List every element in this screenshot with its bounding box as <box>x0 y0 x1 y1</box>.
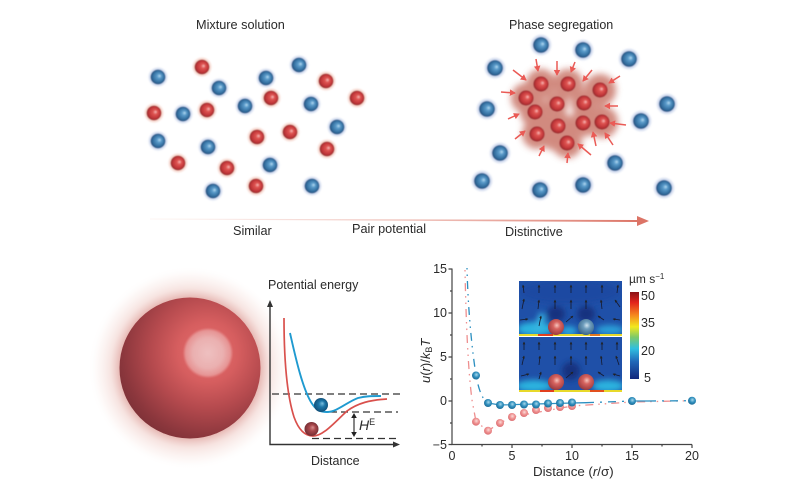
y axis title: B <box>424 347 434 353</box>
y tick labels: 10 <box>433 306 447 320</box>
y tick labels: 5 <box>440 350 447 364</box>
red potential curve <box>284 318 387 436</box>
red ball <box>304 422 318 436</box>
red particles, mixture <box>144 56 368 196</box>
red particles, segregated <box>518 76 610 150</box>
label: distinctive: Distinctive <box>505 225 563 239</box>
y tick labels: 0 <box>440 394 447 408</box>
pair potential arrow <box>150 216 649 226</box>
panel: phase segregation <box>470 18 678 202</box>
red series <box>465 270 692 435</box>
axes and ticks <box>448 268 692 448</box>
y tick labels: 15 <box>433 262 447 276</box>
y tick labels: −5 <box>433 438 447 452</box>
axes <box>267 300 400 448</box>
x tick labels: 20 <box>685 449 699 463</box>
heading: mixture solution: Mixture solution <box>196 18 285 32</box>
inset spheres <box>548 319 594 390</box>
x tick labels: 10 <box>565 449 579 463</box>
panel: mixture solution <box>144 18 368 202</box>
x tick labels: 0 <box>449 449 456 463</box>
x tick labels: 15 <box>625 449 639 463</box>
label: distance: Distance <box>311 454 360 468</box>
label: similar: Similar <box>233 224 273 238</box>
bottom heat map <box>516 337 624 392</box>
colour bar values: 35 <box>641 316 655 330</box>
blue series <box>467 268 696 409</box>
label: pair potential: Pair potential <box>352 222 426 236</box>
heading: phase segregation: Phase segregation <box>509 18 613 32</box>
top heat map <box>517 280 624 336</box>
y axis title: u(r)/k <box>418 353 433 383</box>
panel: potential energy diagram <box>267 278 401 468</box>
unit label: −1 <box>655 272 665 281</box>
colour bar values: 5 <box>644 371 651 385</box>
label: H^E: E <box>369 417 375 427</box>
colour bar values <box>641 289 655 385</box>
colour bar values: 50 <box>641 289 655 303</box>
unit label: µm s <box>629 272 655 286</box>
x axis title: Distance (r/σ) <box>533 464 614 479</box>
inward red arrows <box>501 59 626 163</box>
x tick labels <box>449 449 699 463</box>
blue particles, mixture <box>148 54 348 202</box>
red glow cluster <box>511 69 618 158</box>
blue particles, segregated <box>470 34 678 202</box>
colour bar values: 20 <box>641 344 655 358</box>
blue potential curve <box>290 333 381 412</box>
blue ball <box>314 398 328 412</box>
dashed energy levels <box>272 394 401 438</box>
large red sphere with halo <box>88 266 292 470</box>
colour bar legend <box>629 272 665 385</box>
colour bar <box>630 292 639 379</box>
inset: flow field heat maps <box>516 280 624 392</box>
y tick labels <box>433 262 447 452</box>
H^E double arrow <box>351 413 357 437</box>
panel: pair potential chart <box>418 262 699 479</box>
x tick labels: 5 <box>509 449 516 463</box>
y axis title: T <box>418 338 433 347</box>
heading: potential energy: Potential energy <box>268 278 359 292</box>
flow vectors <box>520 285 620 379</box>
label: H^E: H <box>359 417 369 433</box>
